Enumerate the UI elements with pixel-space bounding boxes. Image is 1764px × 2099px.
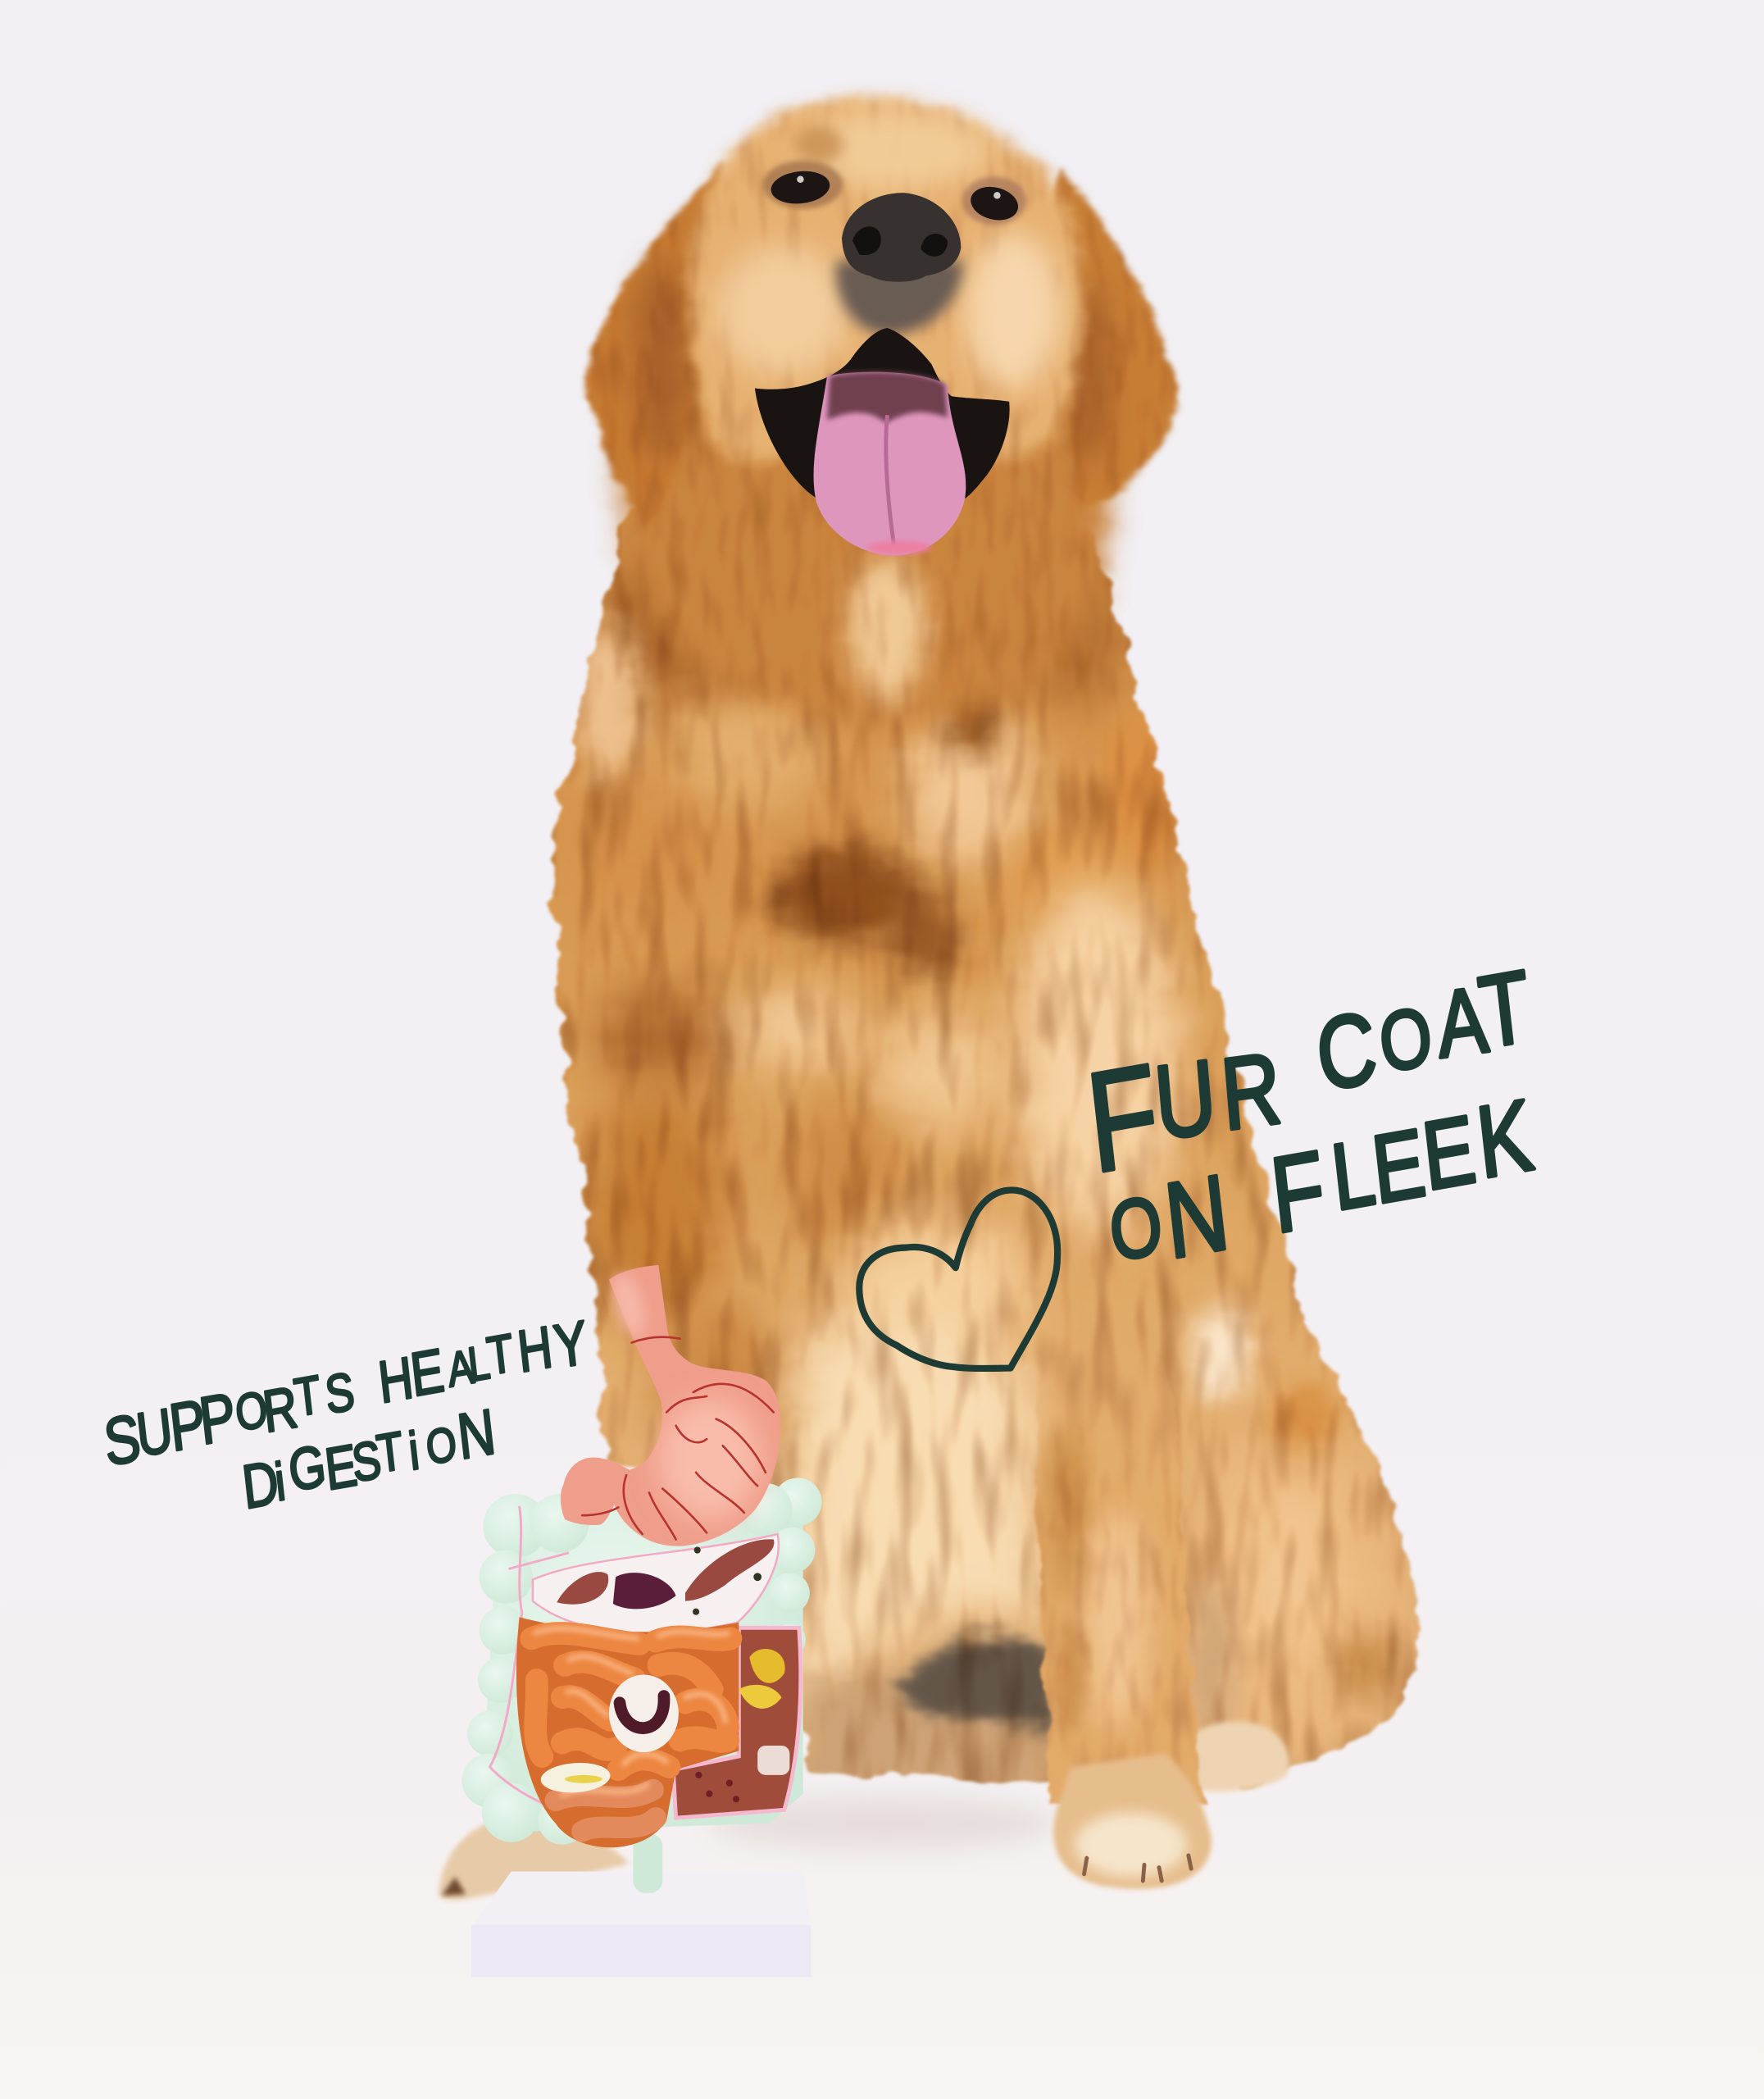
- text: on fleek: E: [1417, 1095, 1480, 1211]
- hind paw: [1178, 1722, 1289, 1792]
- text: fur coat: A: [1433, 967, 1491, 1077]
- stomach veins: [582, 1337, 774, 1540]
- text: fur coat: T: [1474, 948, 1535, 1070]
- text: digestion: i: [406, 1420, 422, 1482]
- text: digestion: S: [349, 1428, 384, 1494]
- right ear: [1051, 167, 1178, 508]
- text: digestion: T: [374, 1419, 407, 1484]
- ear shading: [636, 261, 689, 462]
- floor shadow: [709, 1796, 1057, 1850]
- small intestine: [516, 1617, 739, 1847]
- intestine loops: [531, 1628, 731, 1831]
- nose: [842, 193, 961, 282]
- muzzle lobes: [716, 246, 850, 375]
- text: digestion: G: [285, 1432, 329, 1504]
- handwritten caption: fur coat on fleek: [1080, 948, 1538, 1282]
- text: on fleek: N: [1160, 1153, 1258, 1282]
- neck ruff: [621, 335, 1111, 718]
- tongue: [814, 372, 966, 556]
- shoulder pale patch: [1191, 1306, 1250, 1397]
- text: supports healthy: P: [196, 1378, 239, 1459]
- text: digestion: O: [424, 1417, 459, 1475]
- left ear: [586, 163, 724, 529]
- belly dark fur: [894, 1636, 1051, 1729]
- text: supports healthy: E: [407, 1336, 448, 1409]
- text: supports healthy: S: [322, 1360, 370, 1425]
- text: digestion: E: [322, 1432, 360, 1502]
- text: supports healthy: L: [466, 1336, 493, 1392]
- text: digestion: D: [239, 1448, 282, 1522]
- ascending colon section: [673, 1628, 801, 1818]
- text: on fleek: K: [1471, 1077, 1538, 1200]
- text: fur coat: F: [1080, 1034, 1166, 1203]
- text: fur coat: U: [1151, 1039, 1221, 1162]
- chest colour patches: [567, 549, 1408, 1794]
- text: on fleek: O: [1105, 1178, 1166, 1279]
- dog left paw: [439, 1819, 629, 1900]
- intestine cross section: [609, 1674, 679, 1752]
- anatomical digestive model: [461, 1265, 822, 1977]
- text: fur coat: R: [1217, 1031, 1308, 1151]
- appendix patch: [540, 1760, 611, 1795]
- large intestine: [461, 1477, 822, 1845]
- handwritten caption: supports healthy digestion: [100, 1308, 591, 1522]
- forehead highlight: [798, 110, 990, 190]
- pink mesentery lines: [490, 1506, 569, 1807]
- stomach: [561, 1265, 780, 1546]
- text: on fleek: L: [1327, 1118, 1380, 1230]
- muzzle dark: [836, 261, 964, 335]
- dog: [439, 97, 1420, 1900]
- mouth: [755, 328, 1010, 499]
- text: digestion: N: [454, 1396, 499, 1473]
- text: supports healthy: S: [100, 1400, 144, 1480]
- text: fur coat: C: [1311, 990, 1382, 1113]
- model stem: [633, 1834, 662, 1893]
- text: digestion: i: [272, 1450, 288, 1512]
- under-belly fur: [803, 1675, 1051, 1794]
- text: supports healthy: A: [445, 1340, 477, 1398]
- brow shading: [795, 125, 843, 163]
- text: fur coat: O: [1375, 990, 1436, 1090]
- transverse colon section: [533, 1534, 779, 1633]
- dog head: [586, 97, 1178, 718]
- text: supports healthy: H: [515, 1314, 556, 1385]
- text: supports healthy: P: [166, 1385, 209, 1465]
- icon: heart: [859, 1190, 1057, 1368]
- text: supports healthy: Y: [551, 1308, 591, 1382]
- text: supports healthy: R: [260, 1373, 301, 1445]
- text: on fleek: E: [1367, 1109, 1430, 1224]
- front leg: [1036, 1315, 1204, 1807]
- hind thigh: [1221, 1450, 1396, 1751]
- chin pale fur: [848, 556, 928, 703]
- text: supports healthy: O: [233, 1380, 271, 1441]
- face: [689, 97, 1081, 462]
- head fur: [586, 97, 1178, 718]
- text: on fleek: F: [1266, 1129, 1330, 1256]
- model base: [471, 1871, 811, 1977]
- text: supports healthy: T: [291, 1364, 324, 1428]
- front paw: [1053, 1754, 1212, 1889]
- belly: [788, 1311, 1044, 1727]
- text: supports healthy: H: [375, 1344, 416, 1415]
- text: supports healthy: T: [484, 1322, 516, 1386]
- right eye: [962, 177, 1026, 225]
- left eye: [763, 161, 843, 209]
- dog body: [553, 508, 1420, 1794]
- text: supports healthy: U: [133, 1396, 176, 1470]
